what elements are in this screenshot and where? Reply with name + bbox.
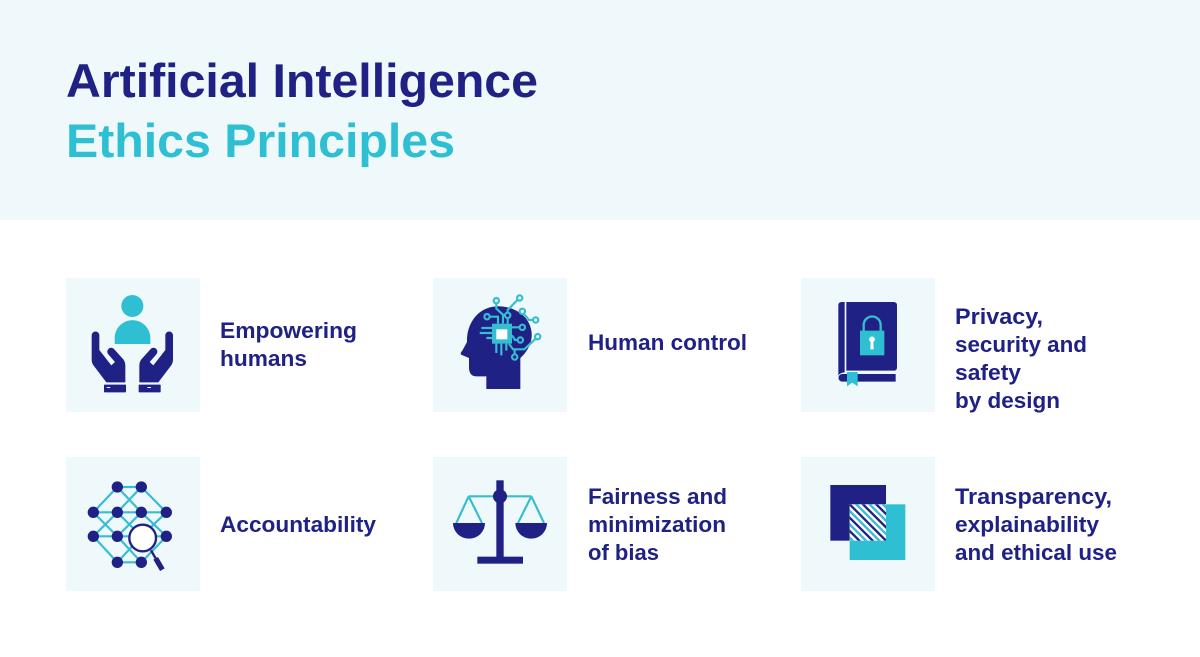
icon: head with circuit bbox=[433, 278, 567, 412]
icon: locked book bbox=[801, 278, 935, 412]
label: accountability: Accountability bbox=[220, 512, 377, 537]
icon: overlapping squares bbox=[801, 457, 936, 591]
label: fairness: minimization bbox=[588, 512, 726, 537]
title: Ethics Principles bbox=[66, 114, 455, 167]
panel: human control bbox=[433, 278, 747, 412]
title: Artificial Intelligence bbox=[66, 54, 538, 107]
panel: privacy bbox=[801, 278, 1087, 413]
panel: accountability bbox=[66, 457, 377, 591]
label: empowering humans: humans bbox=[220, 346, 307, 371]
label: privacy: by design bbox=[955, 388, 1060, 413]
panel: empowering humans bbox=[66, 278, 357, 412]
icon: balance scale bbox=[433, 457, 567, 591]
label: fairness: Fairness and bbox=[588, 484, 727, 509]
label: transparency: Transparency, bbox=[955, 484, 1112, 509]
label: privacy: security and bbox=[955, 332, 1087, 357]
icon: hands holding person bbox=[66, 278, 200, 412]
label: fairness: of bias bbox=[588, 540, 659, 565]
label: transparency: and ethical use bbox=[955, 540, 1117, 565]
label: empowering humans: Empowering bbox=[220, 318, 357, 343]
title bbox=[66, 54, 538, 167]
label: fairness bbox=[588, 484, 727, 565]
label: privacy: Privacy, bbox=[955, 304, 1043, 329]
icon: network with magnifier bbox=[66, 457, 200, 591]
label: empowering humans bbox=[220, 318, 357, 371]
label: human control: Human control bbox=[588, 330, 747, 355]
label: transparency: explainability bbox=[955, 512, 1100, 537]
label: privacy: safety bbox=[955, 360, 1022, 385]
label: transparency bbox=[955, 484, 1117, 565]
panel: transparency bbox=[801, 457, 1117, 591]
header band bbox=[0, 0, 1200, 220]
label: privacy bbox=[955, 304, 1087, 413]
panel: fairness bbox=[433, 457, 727, 591]
